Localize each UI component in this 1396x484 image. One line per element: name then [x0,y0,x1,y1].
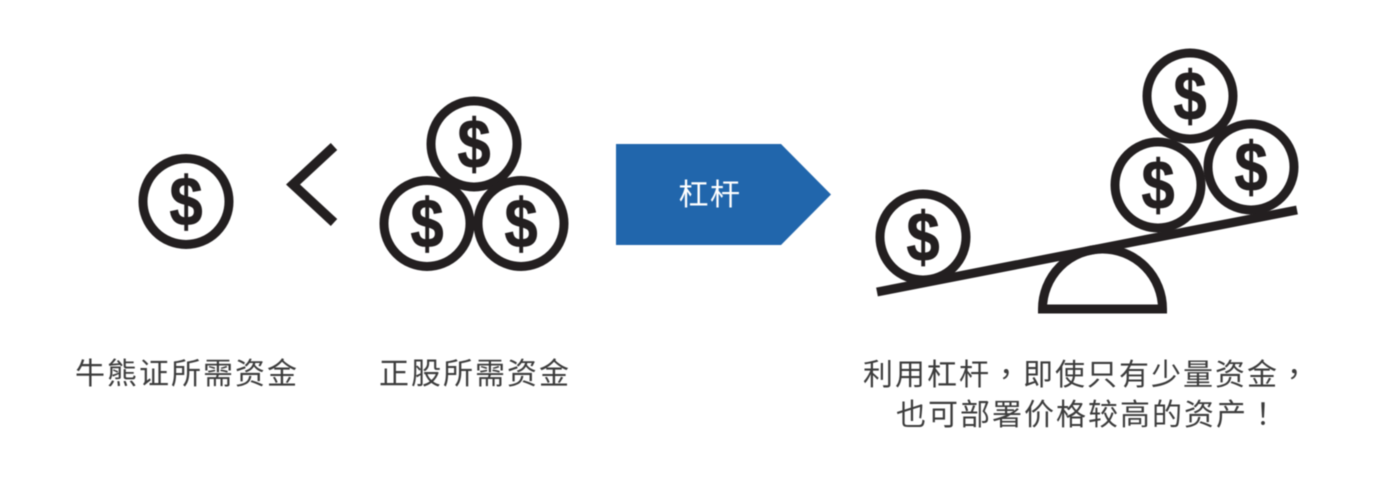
label: stock capital: 正股所需资金 [379,358,571,391]
text: leverage benefit: 也可部署价格较高的资产！ [896,399,1280,432]
label: warrant capital: 牛熊证所需资金 [75,358,299,391]
icon: three coins: $ [504,184,538,263]
icon: less-than chevron [293,146,334,222]
text: leverage benefit [863,359,1311,432]
icon: seesaw with coins: $ [1141,145,1175,224]
icon: three coins: $ [410,184,444,263]
text: leverage benefit: 利用杠杆，即使只有少量资金， [863,359,1311,392]
icon: seesaw with coins [877,53,1297,309]
icon: three coins: $ [457,104,491,183]
arrow: leverage: 杠杆 [678,179,742,212]
icon: single coin: $ [169,162,203,241]
icon: seesaw with coins: $ [1234,127,1268,206]
icon: seesaw with coins: $ [906,197,940,276]
arrow: leverage [616,144,831,245]
icon: seesaw with coins: $ [1173,56,1207,135]
icon: three coins [384,101,564,266]
icon: single coin [143,158,229,244]
